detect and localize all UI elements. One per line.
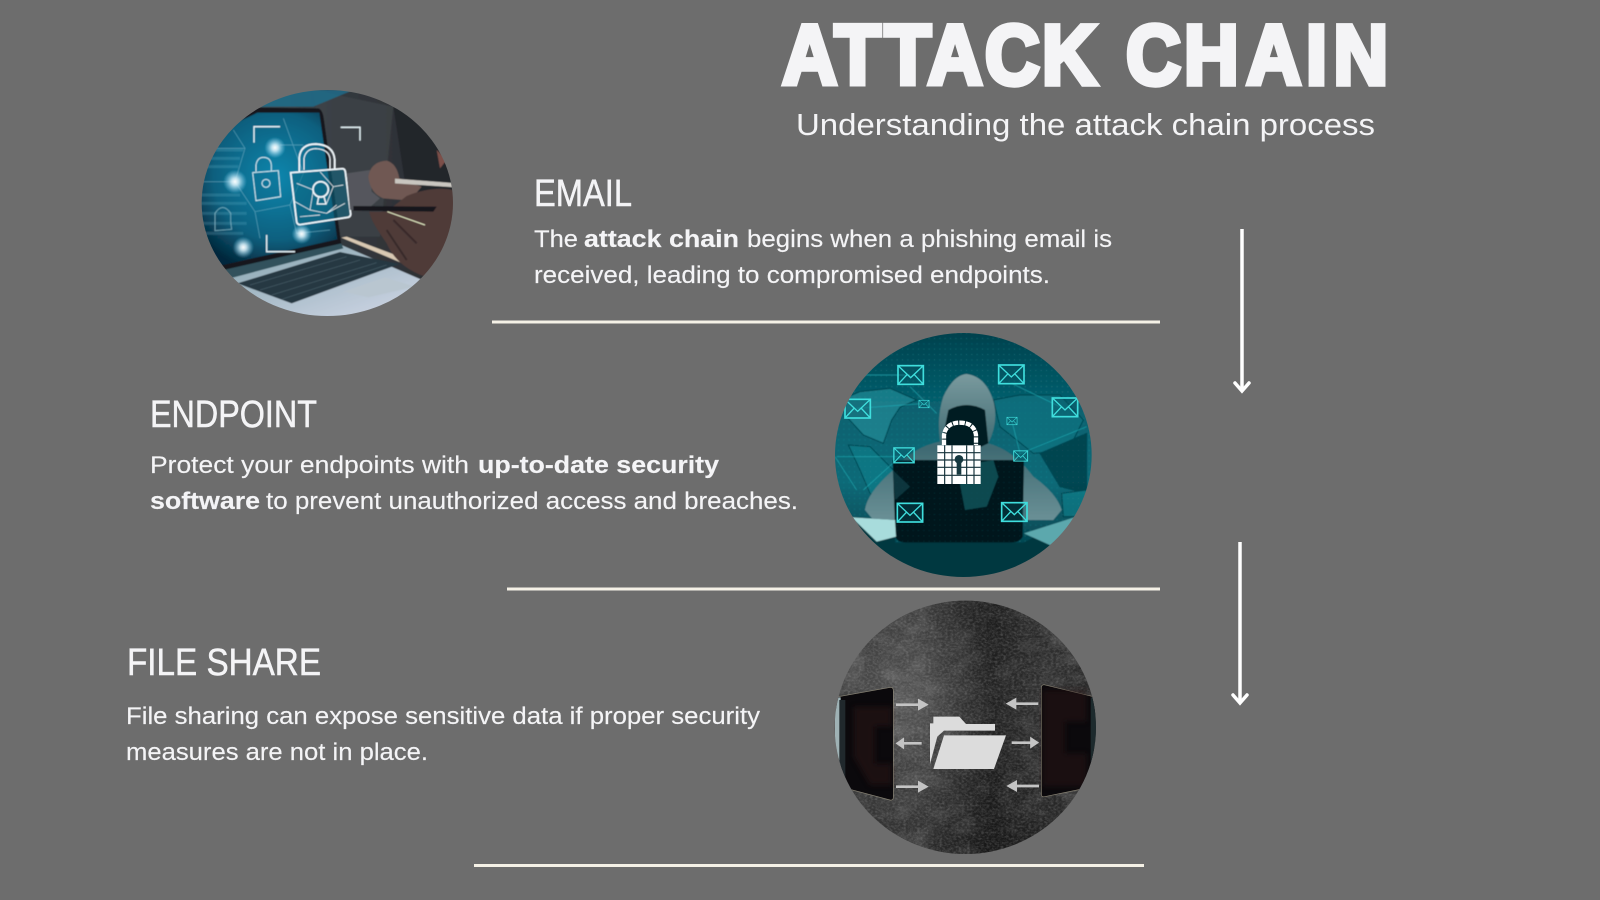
left laptop	[835, 687, 893, 800]
title: ATTACK CHAIN	[782, 9, 1388, 102]
heading: endpoint: ENDPOINT	[150, 394, 317, 436]
text: email description: The	[534, 226, 578, 253]
text: file share description: File sharing can expose sensitive data if proper security	[126, 703, 761, 730]
hands	[347, 170, 380, 210]
small padlock	[253, 157, 281, 201]
text: email description	[534, 226, 1112, 289]
table	[856, 522, 1049, 574]
world map	[840, 388, 1087, 517]
text: endpoint description: to prevent unauthorized access and breaches.	[266, 488, 798, 515]
laptop base and keyboard	[232, 244, 421, 316]
heading: email: EMAIL	[534, 173, 632, 215]
text: file share description	[126, 703, 761, 766]
big padlock	[291, 144, 351, 225]
text: email description: received, leading to compromised endpoints.	[534, 262, 1050, 289]
text: email description: attack chain	[584, 226, 739, 253]
subtitle: Understanding the attack chain process	[796, 108, 1375, 142]
panel: email	[180, 83, 1112, 323]
laptop screen	[221, 107, 342, 270]
text: file share description: measures are not in place.	[126, 739, 428, 766]
panel: file share	[126, 597, 1103, 860]
right laptop	[1041, 685, 1096, 797]
image: hooded hacker with envelopes	[830, 330, 1097, 583]
text: endpoint description: software	[150, 488, 260, 515]
text: endpoint description: Protect your endpoints with	[150, 452, 469, 479]
heading: file share: FILE SHARE	[127, 642, 321, 684]
glowing dots	[264, 137, 286, 158]
folder icon	[930, 717, 1006, 769]
hoodie and arms	[865, 374, 1062, 520]
text: endpoint description: up-to-date security	[478, 452, 719, 479]
arrow: endpoint to file share	[1233, 542, 1247, 703]
laptop	[893, 460, 1024, 543]
padlock	[937, 423, 981, 484]
infographic canvas	[128, 22, 1386, 867]
panel: endpoint	[150, 330, 1097, 583]
exchange arrows	[896, 699, 929, 711]
image: file sharing between laptops	[830, 597, 1103, 860]
image: laptop with padlock	[202, 90, 453, 316]
arrow: email to endpoint	[1235, 229, 1249, 391]
text: email description: begins when a phishing email is	[747, 226, 1112, 253]
text: endpoint description	[150, 452, 798, 515]
envelopes	[898, 366, 923, 384]
